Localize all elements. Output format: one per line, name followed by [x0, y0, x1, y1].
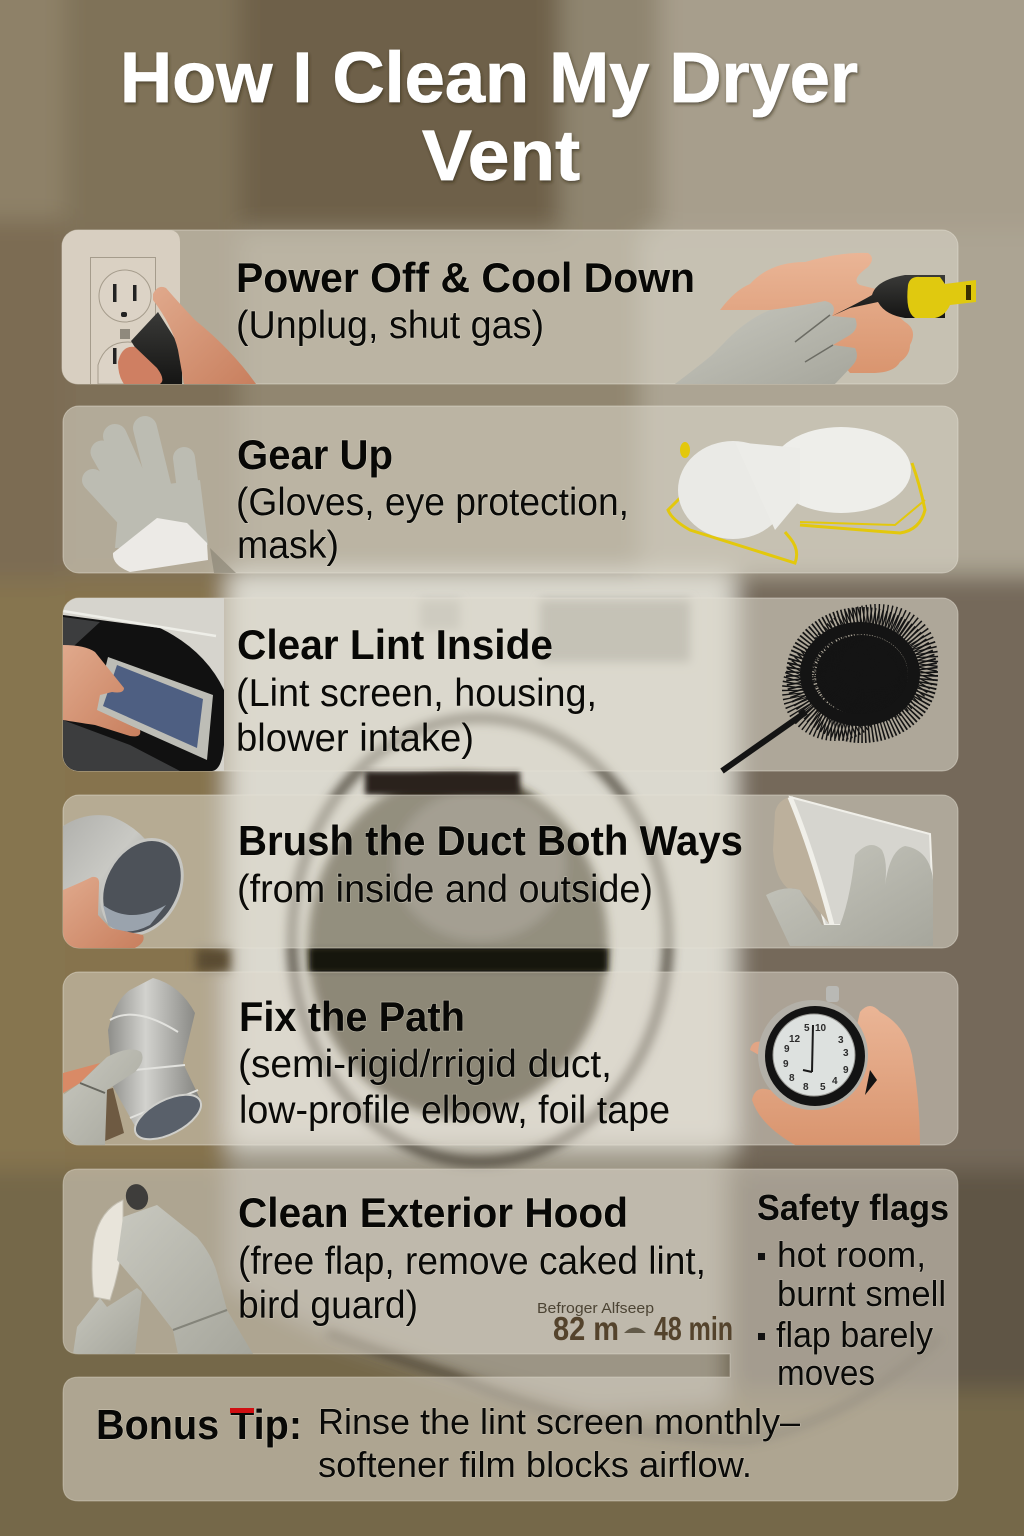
icon: metal elbow duct with glove	[63, 978, 208, 1148]
icon: N95 mask	[668, 427, 925, 563]
icon: glove with dust mask	[93, 428, 236, 573]
icon: gloves on exterior hood	[73, 1182, 253, 1354]
icon: hand and glove holding plug	[675, 253, 976, 384]
heading: Clear Lint Inside	[237, 621, 553, 668]
panel: step 5 fix the path	[63, 972, 958, 1148]
bonus tip text	[318, 1401, 800, 1485]
detail text: blower intake)	[236, 717, 474, 760]
detail text	[236, 481, 629, 567]
bonus tip label: Bonus Tip:	[96, 1401, 302, 1448]
stopwatch numerals: 9	[843, 1065, 849, 1076]
detail text: (semi-rigid/rrigid duct,	[238, 1043, 612, 1086]
detail text	[236, 672, 597, 760]
stopwatch numerals: 5	[804, 1023, 810, 1034]
stopwatch numerals: 5	[820, 1082, 826, 1093]
panel: step 1 power off	[62, 230, 976, 388]
panel: step 6 clean exterior hood with safety flags and bonus tip	[63, 1169, 958, 1501]
title: How I Clean My Dryer	[120, 39, 858, 118]
stopwatch numerals	[783, 1023, 849, 1093]
heading: Fix the Path	[239, 993, 465, 1040]
before and after airflow readout	[537, 1300, 733, 1347]
stopwatch numerals: 3	[838, 1035, 844, 1046]
stopwatch numerals: 8	[789, 1073, 795, 1084]
safety flags list: moves	[777, 1352, 875, 1393]
stopwatch numerals: 10	[815, 1023, 827, 1034]
stopwatch numerals: 8	[803, 1082, 809, 1093]
icon: hand holding stopwatch	[750, 986, 920, 1145]
detail text: (Unplug, shut gas)	[236, 304, 544, 347]
before and after airflow readout: Befroger Alfseep	[537, 1300, 654, 1317]
icon: lint screen in dryer	[63, 598, 224, 771]
panel: step 4 brush duct	[63, 795, 958, 949]
panel: step 2 gear up	[63, 406, 958, 573]
detail text: (free flap, remove caked lint,	[238, 1240, 706, 1283]
stopwatch numerals: 9	[784, 1044, 790, 1055]
detail text	[238, 1043, 670, 1132]
before and after airflow readout: 82 m	[553, 1310, 619, 1347]
stopwatch numerals: 9	[783, 1059, 789, 1070]
bonus tip text: softener film blocks airflow.	[318, 1444, 752, 1485]
detail text: low-profile elbow, foil tape	[239, 1089, 670, 1132]
detail text: (Lint screen, housing,	[236, 672, 597, 715]
safety flags list	[757, 1187, 949, 1393]
detail text: bird guard)	[238, 1284, 418, 1327]
title	[120, 39, 858, 196]
detail text: mask)	[237, 524, 339, 567]
icon: wall outlet with hand	[62, 230, 256, 388]
stopwatch numerals: 4	[832, 1076, 838, 1087]
bonus tip text: Rinse the lint screen monthly–	[318, 1401, 800, 1442]
stopwatch numerals: 3	[843, 1048, 849, 1059]
safety flags list: flap barely	[776, 1314, 933, 1355]
heading: Gear Up	[237, 431, 393, 478]
safety flags list: burnt smell	[777, 1273, 946, 1314]
detail text	[238, 1240, 706, 1327]
icon: white hood with glove	[766, 797, 933, 946]
safety flags list: hot room,	[777, 1234, 926, 1275]
title: Vent	[422, 117, 580, 196]
icon: black duct brush	[722, 607, 933, 771]
heading: Clean Exterior Hood	[238, 1189, 628, 1236]
panel: step 3 clear lint	[63, 598, 958, 771]
icon: metal duct held in hand	[63, 815, 184, 948]
detail text: (Gloves, eye protection,	[236, 481, 629, 524]
stopwatch numerals: 12	[789, 1034, 801, 1045]
safety flags list: Safety flags	[757, 1187, 949, 1228]
detail text: (from inside and outside)	[237, 868, 653, 911]
heading: Power Off & Cool Down	[236, 254, 695, 301]
heading: Brush the Duct Both Ways	[238, 817, 743, 864]
before and after airflow readout: 48 min	[654, 1310, 733, 1347]
